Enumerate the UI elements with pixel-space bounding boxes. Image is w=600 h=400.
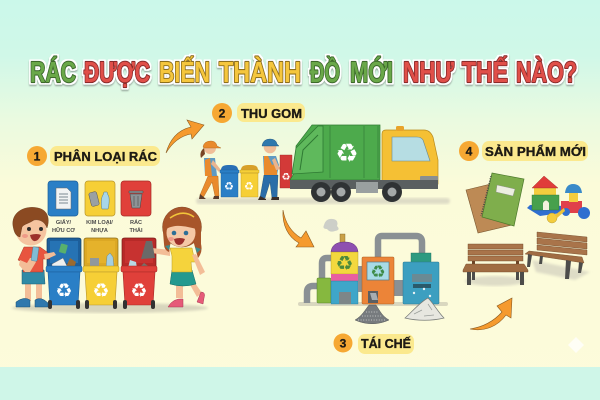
- toy cart: [561, 184, 590, 219]
- teal unit: [403, 253, 439, 304]
- arrow: step 3 to step 4: [470, 298, 512, 330]
- green notebook: [481, 173, 524, 226]
- worker 2: [258, 139, 283, 200]
- title: ĐƯỢC: [84, 57, 150, 89]
- step 4 heading: [459, 141, 588, 161]
- bin label: metal and plastic: KIM LOẠI/: [86, 220, 113, 226]
- step 2 heading: 2: [219, 106, 226, 120]
- truck body: [290, 125, 380, 180]
- bin label: paper: HỮU CƠ: [52, 227, 75, 234]
- icon: cans and bottle tile: [85, 181, 115, 216]
- factory ground: [298, 302, 448, 306]
- red bin: ♻: [130, 280, 148, 302]
- worker 1: [199, 141, 221, 199]
- title: NÀO?: [516, 57, 577, 89]
- boy character: [13, 207, 56, 307]
- green unit: [317, 278, 331, 303]
- step 1 heading: PHÂN LOẠI RÁC: [54, 149, 157, 164]
- step 3 heading: 3: [340, 336, 347, 350]
- step 3 heading: TÁI CHẾ: [361, 336, 411, 351]
- title: THẾ: [462, 57, 508, 89]
- title: THÀNH: [219, 57, 301, 89]
- toy base: [527, 205, 568, 216]
- icon: paper tile: [48, 181, 78, 216]
- small red bin: ♻: [282, 172, 291, 183]
- overhead pipe: [378, 236, 422, 257]
- title: NHƯ: [403, 57, 454, 89]
- bin label: metal and plastic: NHỰA: [91, 228, 108, 234]
- notebooks: [466, 173, 524, 233]
- garbage truck: [290, 125, 438, 202]
- smoke: [323, 219, 339, 232]
- white flakes pile: [405, 298, 444, 320]
- arrow: step 1 to step 2: [166, 120, 204, 153]
- bin label: waste: RÁC: [130, 219, 142, 226]
- title: BIẾN: [159, 57, 210, 89]
- bin label: waste: THẢI: [129, 227, 143, 234]
- recycling factory: [298, 219, 448, 324]
- step 1 heading: 1: [34, 150, 41, 164]
- step 2 heading: THU GOM: [241, 107, 302, 121]
- title: [30, 57, 577, 89]
- sorting icons panel: [48, 181, 151, 234]
- left pipe: [307, 258, 331, 303]
- yellow bin: [83, 238, 119, 309]
- small yellow bin: ♻: [244, 180, 254, 193]
- title: RÁC: [30, 57, 76, 89]
- wheel 2: [331, 182, 351, 202]
- arrow: step 2 to step 3: [283, 210, 314, 247]
- title: MỚI: [350, 57, 393, 89]
- bench 2: [525, 232, 590, 280]
- collection ground: [196, 198, 450, 204]
- step 4 heading: 4: [466, 144, 473, 158]
- connector: [358, 266, 362, 292]
- red bin: [121, 238, 157, 309]
- ground shadow under sorting scene: [12, 303, 208, 313]
- step 3 heading: [334, 334, 414, 354]
- toy house: [532, 176, 559, 210]
- blue bin: [46, 238, 82, 309]
- step 1 heading: [27, 146, 160, 166]
- toy key: [547, 208, 565, 223]
- wheel 1: [311, 182, 331, 202]
- step 4 heading: SẢN PHẨM MỚI: [485, 144, 586, 159]
- watermark sparkle: [568, 337, 584, 353]
- bench 1: [463, 244, 528, 286]
- orange unit: [362, 257, 394, 304]
- title: ĐỒ: [310, 57, 340, 89]
- blue bin: ♻: [55, 280, 73, 302]
- small blue bin: ♻: [224, 180, 234, 193]
- truck chassis: [290, 180, 438, 189]
- collection bins: [220, 155, 292, 197]
- dark pellets pile: [355, 305, 389, 324]
- orange unit: ♻: [370, 262, 386, 282]
- toys: [527, 176, 590, 223]
- tank: ♻: [336, 251, 353, 275]
- girl character: [141, 207, 205, 307]
- brown notebook: [466, 183, 512, 233]
- bin label: paper: GIẤY/: [56, 219, 72, 226]
- truck cab: [382, 126, 438, 185]
- wheel 3: [382, 182, 402, 202]
- icon: trash can tile: [121, 181, 151, 216]
- truck body: ♻: [335, 139, 359, 169]
- step 2 heading: [212, 103, 305, 123]
- tank: [331, 234, 358, 304]
- yellow bin: ♻: [92, 280, 110, 302]
